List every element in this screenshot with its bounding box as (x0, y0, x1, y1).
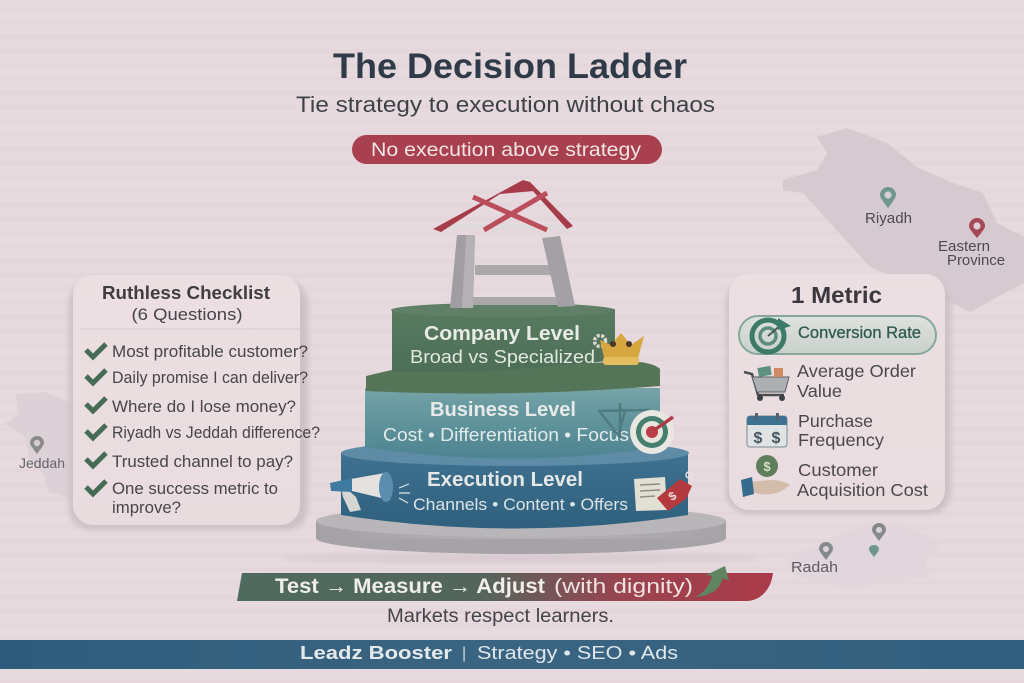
map: Jeddah region (5, 392, 76, 500)
icon: hand holding coin: $ (763, 459, 771, 474)
metric heading: 1 Metric (791, 282, 882, 308)
icon: northern pin (872, 523, 886, 541)
metric: average order value: Average Order (797, 361, 916, 381)
label: Eastern Province (938, 238, 1005, 269)
banner main text: Test → Measure → Adjust (275, 575, 545, 598)
icon: crossed-out roof (433, 180, 573, 232)
map: Radah region (785, 523, 942, 590)
execution sublabel: Channels • Content • Offers (413, 495, 628, 514)
warning pill: No execution above strategy (371, 139, 641, 161)
icon: check marks (86, 344, 106, 494)
metric: purchase frequency: Frequency (798, 430, 884, 450)
icon: small teal pin (869, 545, 879, 557)
icon: target with arrow (752, 318, 791, 352)
icon: crown (600, 333, 644, 365)
footer bar (0, 640, 1024, 669)
panel: 1 metric (726, 274, 951, 514)
icon: gear (594, 336, 606, 346)
checklist heading: Ruthless Checklist (102, 283, 270, 303)
icon: growth arrow (695, 566, 729, 597)
icon: hand holding coin (741, 455, 790, 497)
metric: purchase frequency: Purchase (798, 411, 873, 431)
highlighted metric: conversion rate: Conversion Rate (798, 324, 921, 342)
checklist questions: One success metric to (112, 480, 278, 498)
business sublabel: Cost • Differentiation • Focus (383, 425, 629, 445)
checklist questions: Trusted channel to pay? (112, 453, 293, 471)
highlighted metric: conversion rate (739, 316, 936, 354)
icon: calendar with dollars (747, 413, 787, 447)
company sublabel: Broad vs Specialized (410, 347, 595, 367)
checklist questions (112, 343, 320, 517)
metric: purchase frequency (747, 411, 884, 450)
tier: business level (365, 388, 674, 458)
banner: test measure adjust (237, 566, 773, 601)
map: Riyadh and Eastern Province region (783, 128, 1024, 312)
icon: document and price tag (634, 472, 692, 511)
warning pill (352, 135, 662, 164)
icon: target (630, 410, 674, 454)
icon: megaphone (330, 472, 410, 512)
metric: customer acquisition cost: Acquisition Cost (797, 480, 928, 500)
metric: customer acquisition cost: Customer (798, 460, 878, 480)
label: Eastern Province: Eastern (938, 238, 990, 255)
label: Riyadh: Riyadh (865, 210, 912, 227)
ladder pyramid (281, 180, 761, 564)
label: Eastern Province: Province (947, 252, 1005, 269)
icon: Riyadh pin (880, 187, 896, 208)
subtitle: Tie strategy to execution without chaos (296, 92, 715, 117)
footer services: Strategy • SEO • Ads (477, 642, 678, 663)
checklist subheading: (6 Questions) (132, 306, 242, 324)
base platform (281, 505, 761, 564)
icon: Jeddah pin (30, 436, 44, 454)
title: The Decision Ladder (333, 47, 687, 86)
metric: customer acquisition cost (741, 455, 928, 500)
panel: ruthless checklist (69, 275, 320, 530)
checklist questions: Riyadh vs Jeddah difference? (112, 424, 320, 442)
tier: execution level (330, 440, 692, 528)
checklist questions: Where do I lose money? (112, 398, 296, 416)
icon: document and price tag: $ (666, 488, 679, 504)
icon: Eastern Province pin (969, 218, 985, 238)
icon: calendar with dollars: $ (772, 430, 781, 447)
metric: average order value: Value (797, 381, 842, 401)
footer brand: Leadz Booster (300, 643, 452, 663)
tier: company level (366, 303, 660, 394)
banner note: (with dignity) (554, 576, 693, 598)
icon: shopping cart (744, 366, 789, 401)
icon: Radah pin (819, 542, 833, 560)
business heading: Business Level (430, 399, 576, 421)
company heading: Company Level (424, 323, 580, 345)
icon: broken ladder (450, 235, 575, 308)
icon: balance scale (598, 403, 650, 438)
footer divider mark: | (462, 645, 466, 662)
label: Jeddah: Jeddah (19, 455, 65, 471)
execution heading: Execution Level (427, 469, 583, 491)
checklist questions: Most profitable customer? (112, 343, 308, 361)
tagline: Markets respect learners. (387, 606, 614, 627)
icon: calendar with dollars: $ (754, 430, 763, 447)
checklist questions: Daily promise I can deliver? (112, 369, 308, 387)
label: Radah: Radah (791, 559, 838, 576)
metric: average order value (744, 361, 916, 401)
checklist questions: improve? (112, 499, 181, 517)
